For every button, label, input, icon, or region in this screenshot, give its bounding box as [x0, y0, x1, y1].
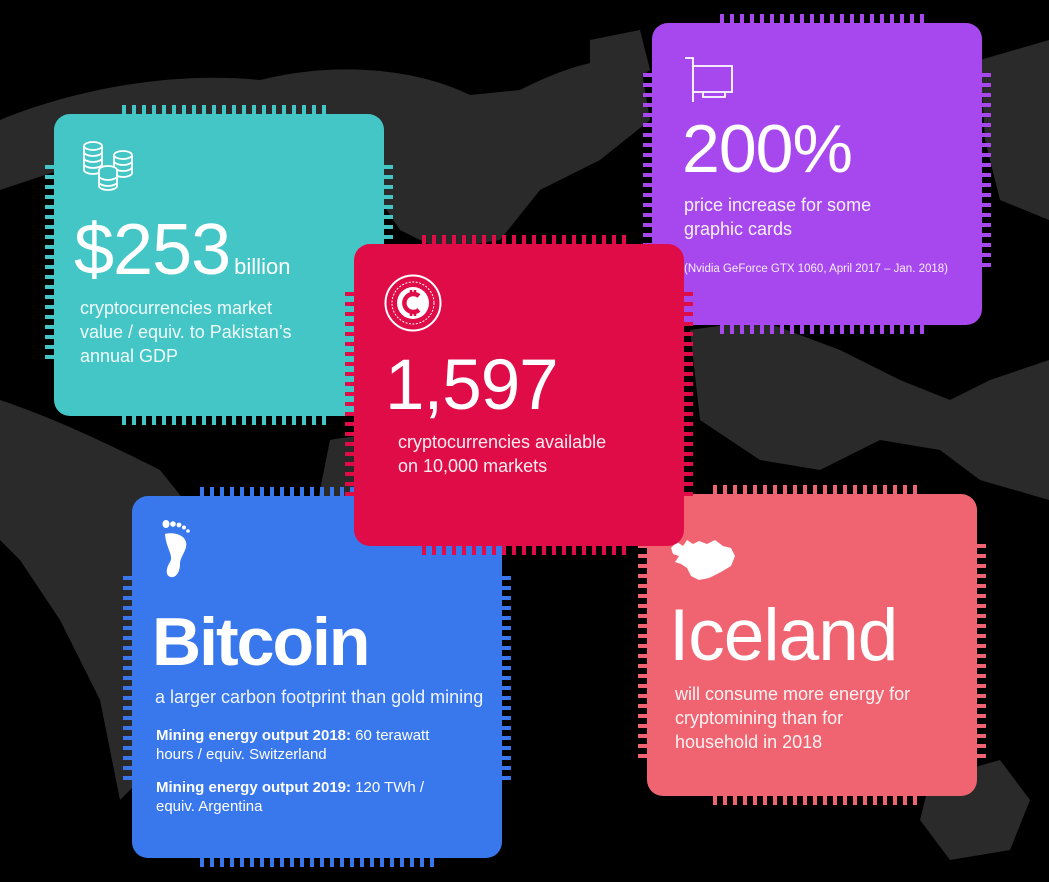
text: Iceland energy: will consume more energy for	[675, 684, 910, 704]
heading: $253 billion: $253billion	[74, 210, 290, 290]
text: market value: annual GDP	[80, 346, 178, 366]
panel: cryptocurrencies (red)	[354, 244, 684, 546]
heading: Bitcoin: Bitcoin	[152, 604, 368, 680]
text: market value: value / equiv. to Pakistan’s	[80, 322, 291, 342]
text: energy 2019	[156, 779, 424, 815]
text: Iceland energy: household in 2018	[675, 732, 822, 752]
heading: Iceland: Iceland	[669, 595, 897, 676]
icon: footprint	[162, 520, 190, 578]
panel: graphic cards (purple)	[652, 23, 982, 325]
text: energy 2018: Mining energy output 2018: 60 terawatt	[156, 727, 429, 744]
panel: market value (teal)	[54, 114, 384, 416]
text: markets	[398, 432, 606, 476]
icon: crypto coin seal	[384, 274, 442, 332]
text: markets: cryptocurrencies available	[398, 432, 606, 452]
text: Iceland energy: cryptomining than for	[675, 708, 843, 728]
text: energy 2018: hours / equiv. Switzerland	[156, 746, 327, 763]
heading: 200%: 200%	[682, 111, 852, 187]
text: market value	[80, 298, 291, 366]
text: carbon footprint: a larger carbon footprint than gold mining	[155, 687, 483, 707]
text: Iceland energy	[675, 684, 910, 752]
text: price increase: price increase for some	[684, 195, 871, 215]
heading: 1,597: 1,597	[385, 346, 558, 425]
panel: Iceland (coral)	[647, 494, 977, 796]
icon: coins	[83, 141, 133, 191]
text: price increase: graphic cards	[684, 219, 792, 239]
text: price increase	[684, 195, 871, 239]
text: markets: on 10,000 markets	[398, 456, 547, 476]
icon: Iceland map	[671, 540, 735, 580]
text: footnote: (Nvidia GeForce GTX 1060, April 2017 – Jan. 2018)	[684, 263, 948, 275]
icon: graphic card	[685, 57, 733, 102]
text: market value: cryptocurrencies market	[80, 298, 272, 318]
text: energy 2018	[156, 727, 430, 763]
text: energy 2019: equiv. Argentina	[156, 798, 262, 815]
text: energy 2019: Mining energy output 2019: 120 TWh /	[156, 779, 424, 796]
panel: Bitcoin (blue)	[132, 496, 502, 858]
